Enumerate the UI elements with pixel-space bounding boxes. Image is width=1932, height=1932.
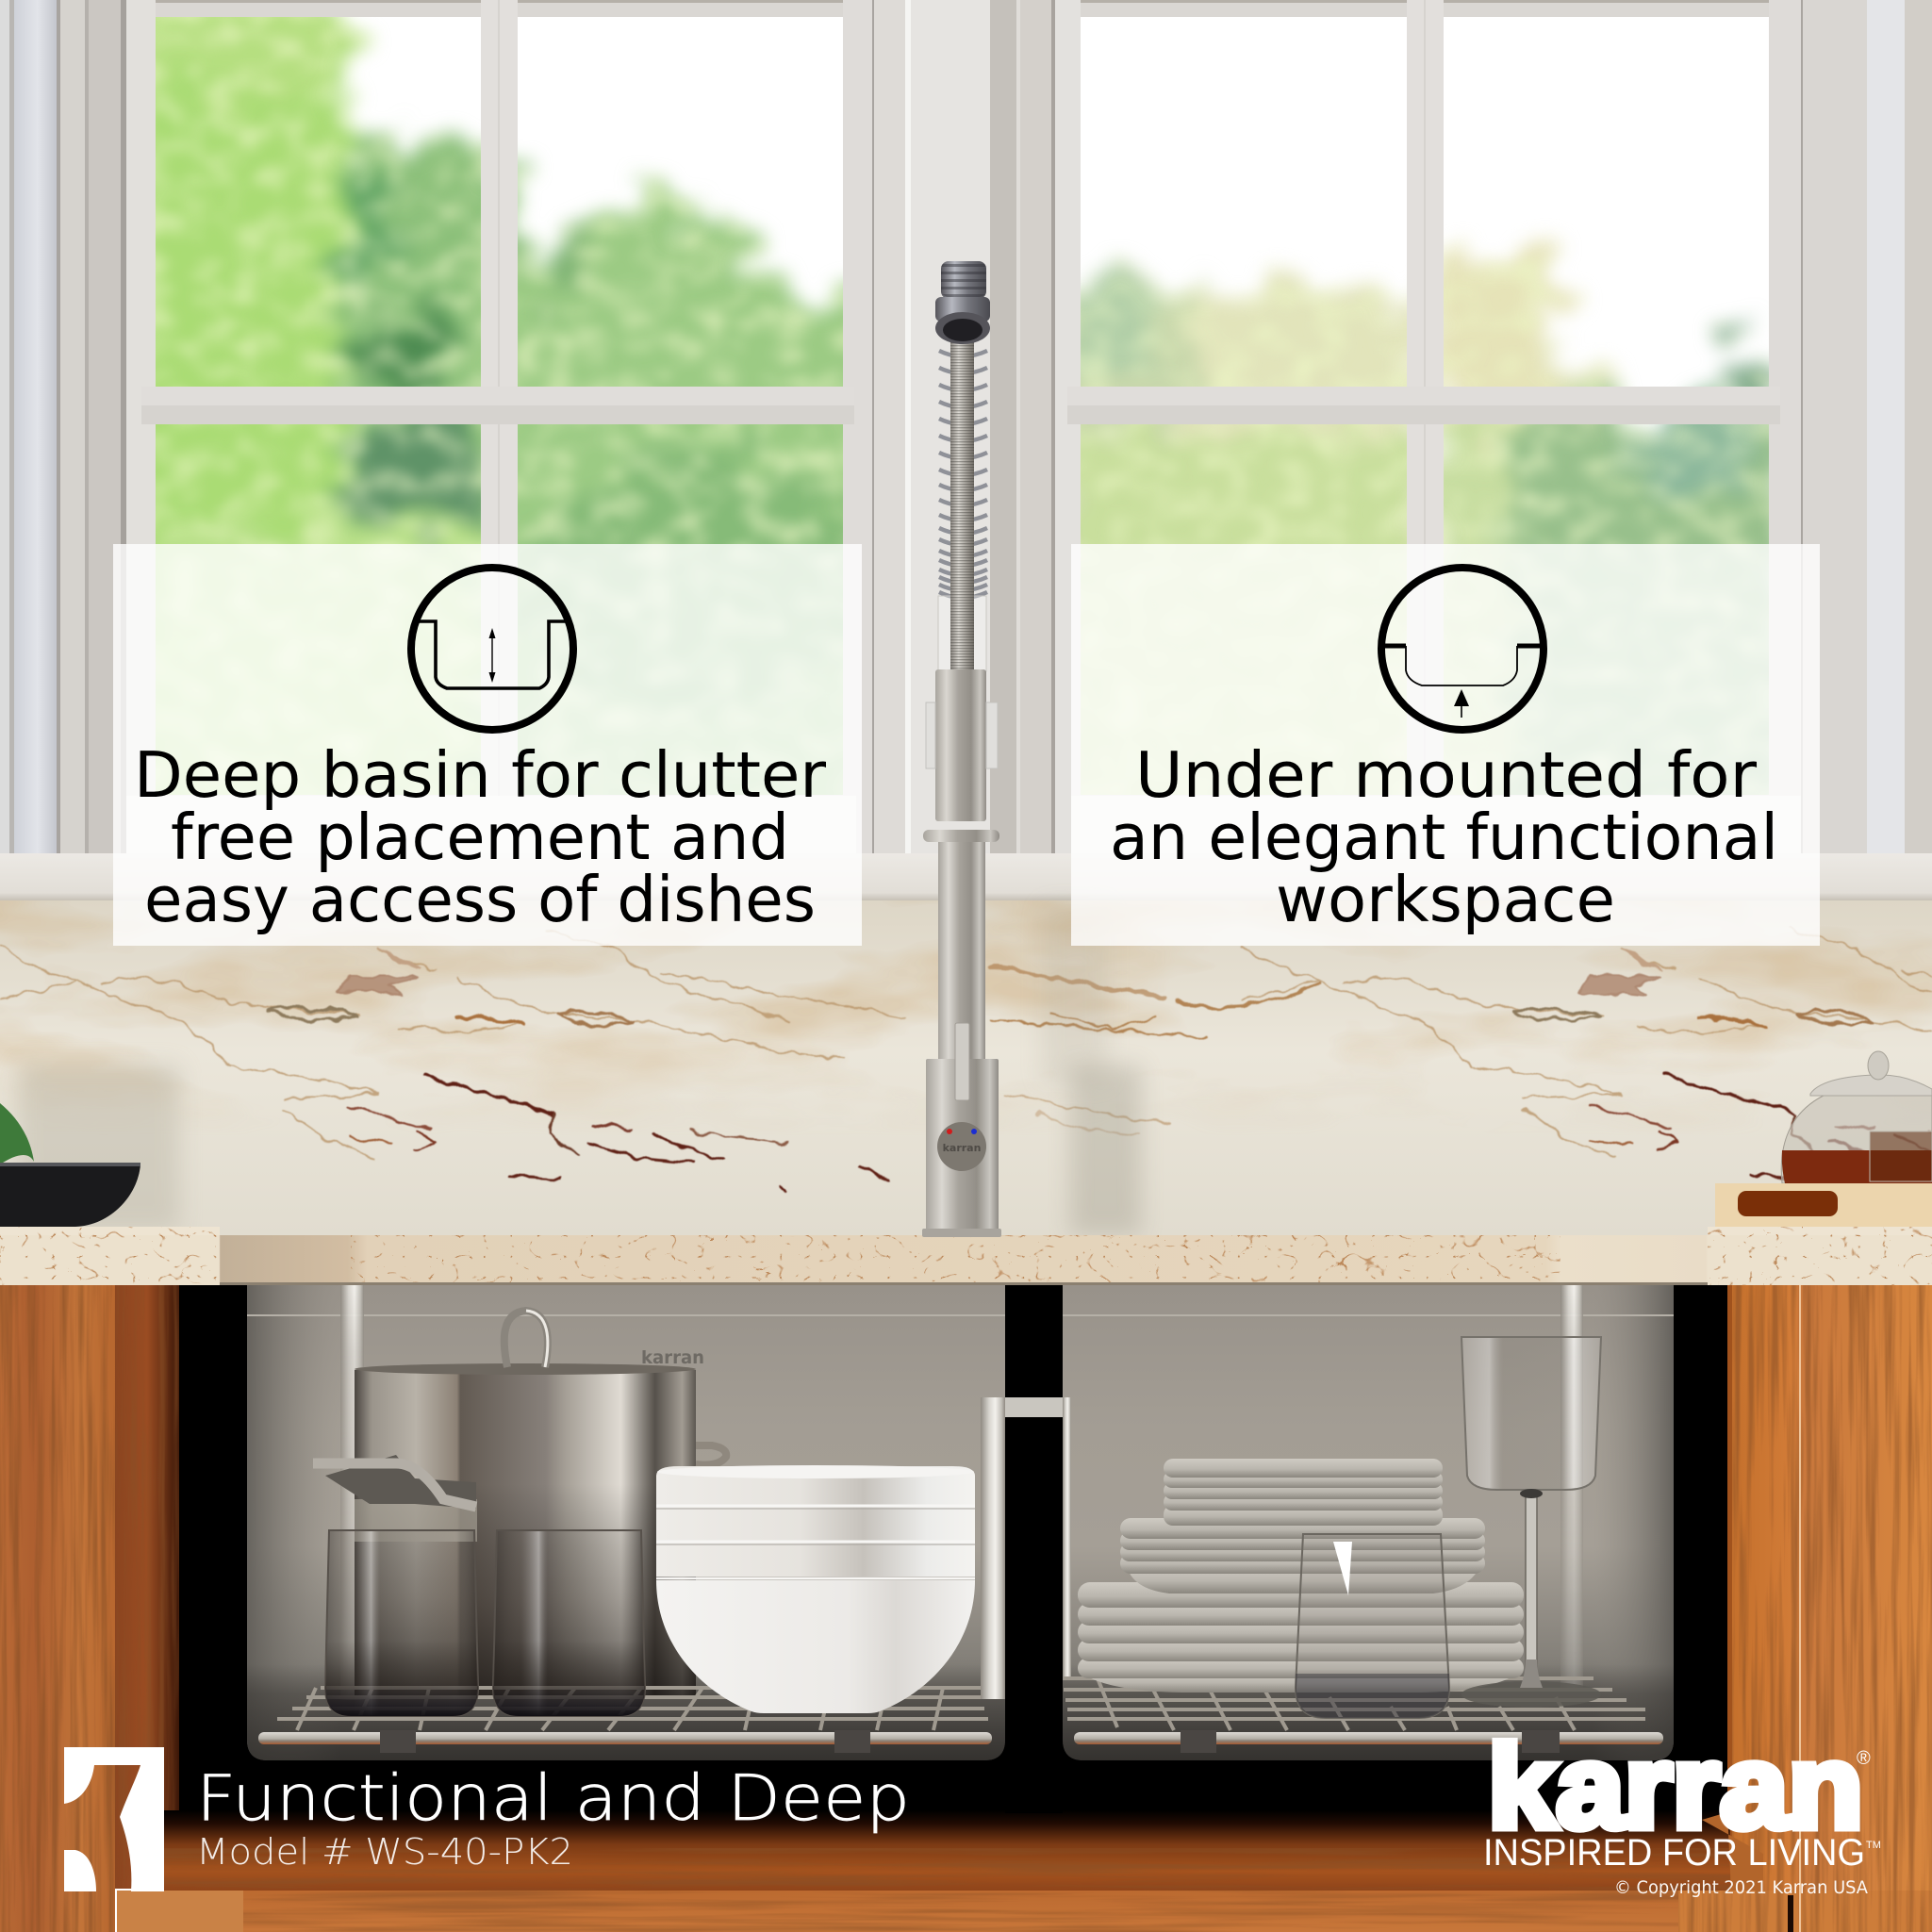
- model number: Model # WS-40-PK2: [196, 1831, 573, 1873]
- jar lid: [1810, 1075, 1932, 1096]
- faucet shadow on backsplash: [1070, 1065, 1141, 1235]
- garden view through windows: [156, 17, 1769, 795]
- panel: deep basin: [113, 544, 862, 946]
- logo wordmark: karran: [1488, 1722, 1863, 1853]
- stock pot: [313, 1311, 726, 1695]
- base foot: [922, 1229, 1001, 1237]
- faucet body: [926, 1059, 999, 1230]
- panel: under mounted: [1071, 544, 1820, 946]
- text: under mounted description: an elegant functional: [1110, 801, 1778, 874]
- middle tumbler glass: [493, 1530, 645, 1716]
- faucet brand mark: karran: [943, 1142, 981, 1154]
- left tumbler glass: [325, 1530, 478, 1716]
- left sink basin: [247, 1285, 1005, 1760]
- sink divider: [981, 1397, 1071, 1813]
- text: under mounted description: Under mounted for: [1135, 738, 1757, 812]
- text: under mounted description: [1110, 738, 1778, 936]
- tagline: INSPIRED FOR LIVING: [1483, 1832, 1865, 1874]
- bowl shadow on backsplash: [19, 1065, 179, 1230]
- right cabinet wood: [1727, 1285, 1932, 1932]
- window wall and frames: [0, 0, 1932, 853]
- window mullions: [126, 0, 1801, 853]
- hot indicator: [947, 1129, 952, 1134]
- marble backsplash: [0, 900, 1932, 1235]
- tea jar on tray: [1715, 1051, 1932, 1227]
- spring coil: [939, 351, 987, 598]
- tray: [1715, 1183, 1932, 1227]
- lever: [955, 1023, 969, 1100]
- clear lower spring sleeve: [938, 596, 986, 671]
- control plate: [937, 1122, 986, 1171]
- cold indicator: [971, 1129, 977, 1134]
- countertop: [0, 1227, 1932, 1286]
- icon: under mounted basin: [1381, 568, 1544, 730]
- upper sleeve: [935, 669, 986, 821]
- title: Functional and Deep: [196, 1761, 910, 1835]
- lid knob: [1868, 1051, 1889, 1080]
- lower tube: [938, 842, 985, 1063]
- trademark: TM: [1866, 1840, 1881, 1851]
- small glass: [1870, 1131, 1932, 1181]
- dark cavity around sink: [179, 1285, 1730, 1832]
- black bowl with leaf: [0, 1103, 140, 1227]
- text: deep basin description: free placement and: [171, 801, 789, 874]
- sink brand mark: karran: [641, 1347, 704, 1368]
- left drying rack: [258, 1688, 992, 1753]
- right tumbler glass: [1296, 1534, 1449, 1718]
- text: deep basin description: [134, 738, 826, 936]
- icon: deep basin: [411, 568, 573, 730]
- icon: karran R mark: [64, 1747, 164, 1891]
- text: deep basin description: Deep basin for clutter: [134, 738, 826, 812]
- tea: [1782, 1150, 1932, 1183]
- tray slot: [1738, 1191, 1838, 1216]
- right drying rack: [1064, 1674, 1663, 1753]
- text: under mounted description: workspace: [1276, 863, 1615, 936]
- jar body: [1781, 1094, 1932, 1183]
- flexible hose: [950, 332, 974, 671]
- sleeve clips: [926, 702, 998, 768]
- wine glass: [1461, 1337, 1601, 1708]
- text: deep basin description: easy access of dishes: [144, 863, 816, 936]
- spray head cap: [935, 261, 990, 344]
- karran logo: [1483, 1722, 1881, 1898]
- flange: [923, 830, 999, 842]
- left cabinet wood: [0, 1285, 179, 1932]
- stacked white bowls: [656, 1465, 975, 1713]
- right sink basin: [1063, 1285, 1674, 1760]
- bottom wood rail: [117, 1810, 1932, 1932]
- copyright: © Copyright 2021 Karran USA: [1614, 1877, 1868, 1898]
- registered mark: ®: [1857, 1748, 1871, 1769]
- window sill: [0, 853, 1932, 902]
- stacked plates: [1078, 1459, 1524, 1693]
- faucet: [922, 261, 1001, 1237]
